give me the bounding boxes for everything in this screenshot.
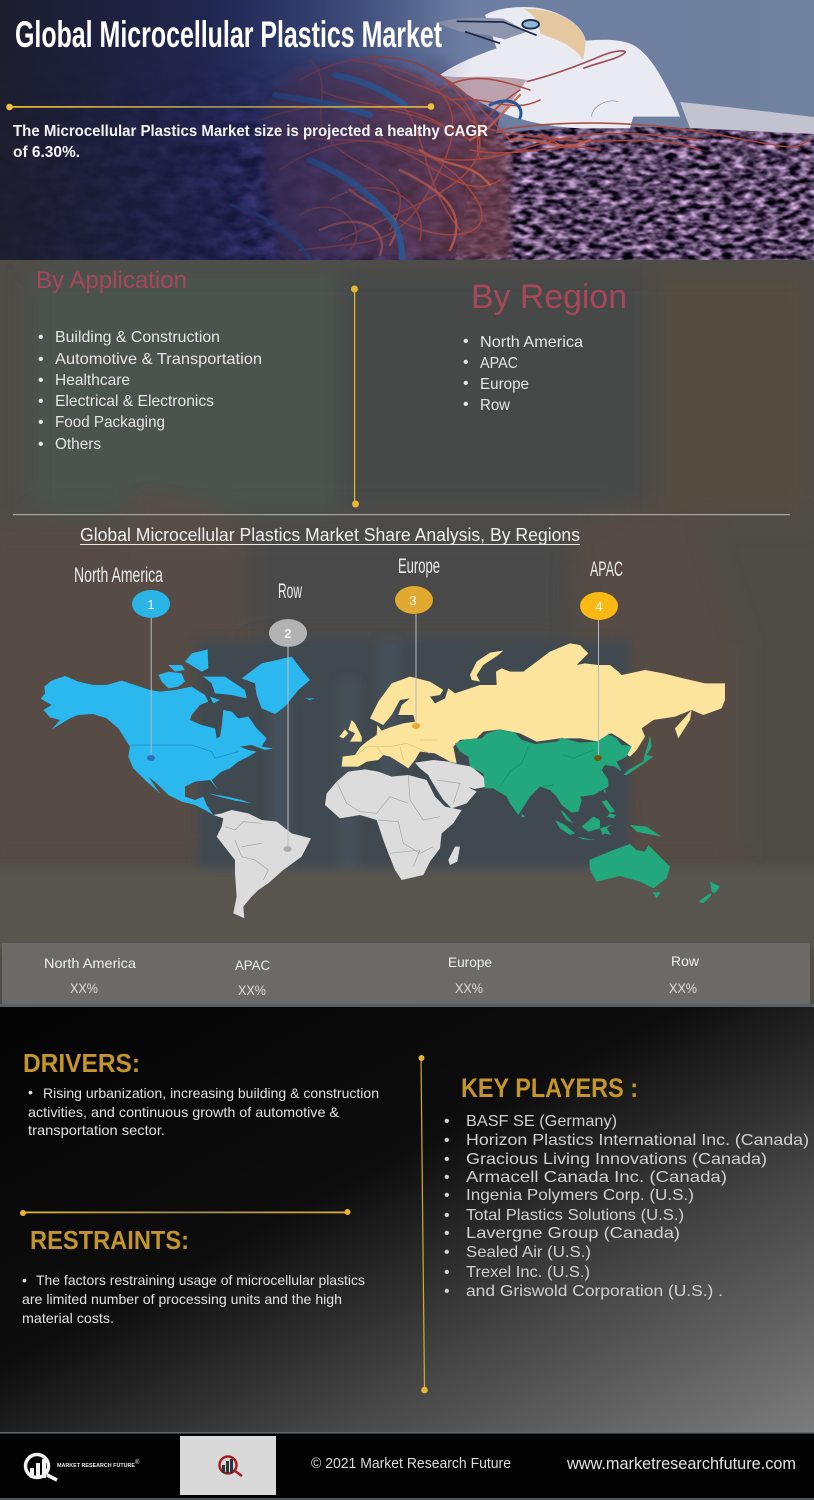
list: key players: • <box>444 1132 450 1149</box>
list: key players: • <box>444 1264 450 1281</box>
list: key players: • <box>444 1283 450 1300</box>
panel: regional share strip: XX% <box>455 980 483 996</box>
footer website: www.marketresearchfuture.com <box>566 1454 796 1473</box>
divider: gold header line <box>6 103 434 110</box>
list: key players: • <box>444 1151 450 1168</box>
heading: market share analysis: Global Microcellular Plastics Market Share Analysis, By Regions <box>80 525 580 545</box>
list: key players: • <box>444 1225 450 1242</box>
list: key players: • <box>444 1187 450 1204</box>
list: key players: Horizon Plastics International Inc. (Canada) <box>466 1132 809 1149</box>
list: regions: APAC <box>480 355 518 372</box>
panel: regional share strip: APAC <box>235 957 270 973</box>
panel: By Application <box>36 267 262 453</box>
divider: gold vertical line <box>418 1055 428 1393</box>
list: application segments: Food Packaging <box>55 414 165 431</box>
divider: gold vertical line <box>351 286 359 508</box>
panel: regional share strip: XX% <box>669 980 697 996</box>
list: regions: Row <box>480 397 510 414</box>
list: key players: Trexel Inc. (U.S.) <box>466 1264 590 1281</box>
panel: drivers <box>23 1048 379 1138</box>
heading: key players: KEY PLAYERS : <box>461 1073 638 1103</box>
list: key players: • <box>444 1244 450 1261</box>
map pin labels: Row <box>278 580 302 603</box>
list: application segments: • <box>38 351 44 368</box>
pin 3: Europe: 3 <box>409 593 417 608</box>
text: drivers body: transportation sector. <box>28 1122 165 1138</box>
world map <box>41 643 725 918</box>
list: key players: Total Plastics Solutions (U.S.) <box>466 1207 684 1224</box>
list: key players <box>444 1113 809 1300</box>
logo: Market Research Future white <box>26 1454 140 1480</box>
text: restraints body <box>22 1272 365 1326</box>
list: application segments: Automotive & Transportation <box>55 351 262 368</box>
list: application segments: • <box>38 414 44 431</box>
divider: gold horizontal line <box>20 1209 350 1216</box>
list: key players: Lavergne Group (Canada) <box>466 1225 680 1242</box>
panel: regional share strip <box>2 943 810 1004</box>
pin 1: North America <box>132 590 170 761</box>
text: drivers body: activities, and continuous growth of automotive & <box>28 1104 340 1120</box>
list: application segments: Electrical & Electronics <box>55 393 214 410</box>
panel: restraints <box>22 1225 365 1326</box>
fishing net strands <box>230 55 810 260</box>
panel: By Region <box>463 278 627 414</box>
icon: gannet bird <box>435 7 680 128</box>
map region: North America <box>41 649 315 815</box>
pin 4: APAC: 4 <box>595 599 603 614</box>
pin 4: APAC <box>580 592 618 761</box>
list: key players: BASF SE (Germany) <box>466 1113 617 1130</box>
panel: regional share strip: North America <box>44 955 136 971</box>
text: restraints body: • <box>22 1272 27 1288</box>
panel: segmentation and map background <box>0 260 814 1010</box>
map region: APAC <box>455 729 720 903</box>
list: application segments <box>38 329 262 453</box>
map pin labels <box>74 555 623 603</box>
text: restraints body: are limited number of processing units and the high <box>22 1291 342 1307</box>
panel: regional share strip: XX% <box>70 980 98 996</box>
list: regions: • <box>463 375 469 392</box>
heading: drivers: DRIVERS: <box>23 1048 140 1078</box>
logo: grey box <box>180 1436 276 1495</box>
list: key players: Sealed Air (U.S.) <box>466 1244 591 1261</box>
icon: rock ledge <box>680 102 814 134</box>
pin 2: Row <box>269 619 307 852</box>
panel: regional share strip: Row <box>671 953 700 969</box>
panel: regional share strip: Europe <box>448 954 492 970</box>
panel: key players <box>444 1073 809 1300</box>
list: application segments: • <box>38 372 44 389</box>
list: key players: • <box>444 1207 450 1224</box>
text: CAGR statement: of 6.30%. <box>13 144 80 161</box>
text: restraints body: material costs. <box>22 1310 114 1326</box>
list: application segments: • <box>38 329 44 346</box>
text: drivers body <box>28 1084 379 1138</box>
map pin labels: APAC <box>590 558 623 581</box>
footer copyright: © 2021 Market Research Future <box>311 1455 511 1472</box>
map region: Row (South America) <box>213 810 311 918</box>
heading: By Region: By Region <box>471 278 627 316</box>
panel: regional share strip: XX% <box>238 982 266 998</box>
list: key players: • <box>444 1169 450 1186</box>
list: application segments: • <box>38 436 44 453</box>
pin 3: Europe <box>395 586 433 729</box>
map pin labels: North America <box>74 564 163 587</box>
list: application segments: Healthcare <box>55 372 130 389</box>
panel: drivers, restraints and key players <box>0 1004 814 1433</box>
list: key players: Gracious Living Innovations (Canada) <box>466 1151 767 1168</box>
header banner: gannet in fishing net photo <box>0 0 814 260</box>
list: key players: Armacell Canada Inc. (Canada) <box>466 1169 727 1186</box>
list: application segments: • <box>38 393 44 410</box>
list: application segments: Building & Construction <box>55 329 220 346</box>
map region: Row (Africa and Middle East) <box>325 760 487 880</box>
logo: Market Research Future white: MARKET RESEARCH FUTURE <box>57 1463 135 1469</box>
text: restraints body: The factors restraining usage of microcellular plastics <box>36 1272 365 1288</box>
map region: Europe and Russia <box>339 643 725 768</box>
list: regions: Europe <box>480 376 529 393</box>
list: key players: and Griswold Corporation (U.S.) . <box>466 1283 723 1300</box>
list: regions: North America <box>480 334 583 351</box>
list: regions <box>463 333 583 414</box>
text: drivers body: • <box>28 1084 33 1100</box>
list: key players: Ingenia Polymers Corp. (U.S.) <box>466 1187 694 1204</box>
list: regions: • <box>463 396 469 413</box>
pin 1: North America: 1 <box>147 597 155 612</box>
text: CAGR statement: The Microcellular Plastics Market size is projected a healthy CAGR <box>13 123 488 140</box>
map pin labels: Europe <box>398 555 440 578</box>
text: CAGR statement <box>13 123 488 161</box>
title: Global Microcellular Plastics Market <box>15 14 442 55</box>
list: key players: • <box>444 1113 450 1130</box>
logo: Market Research Future white: ® <box>135 1459 140 1466</box>
heading: restraints: RESTRAINTS: <box>30 1225 189 1255</box>
heading: By Application: By Application <box>36 267 187 294</box>
list: regions: • <box>463 333 469 350</box>
list: regions: • <box>463 354 469 371</box>
footer <box>0 1432 814 1500</box>
text: drivers body: Rising urbanization, increasing building & construction <box>43 1085 379 1101</box>
list: application segments: Others <box>55 436 101 453</box>
pin 2: Row: 2 <box>284 626 292 641</box>
